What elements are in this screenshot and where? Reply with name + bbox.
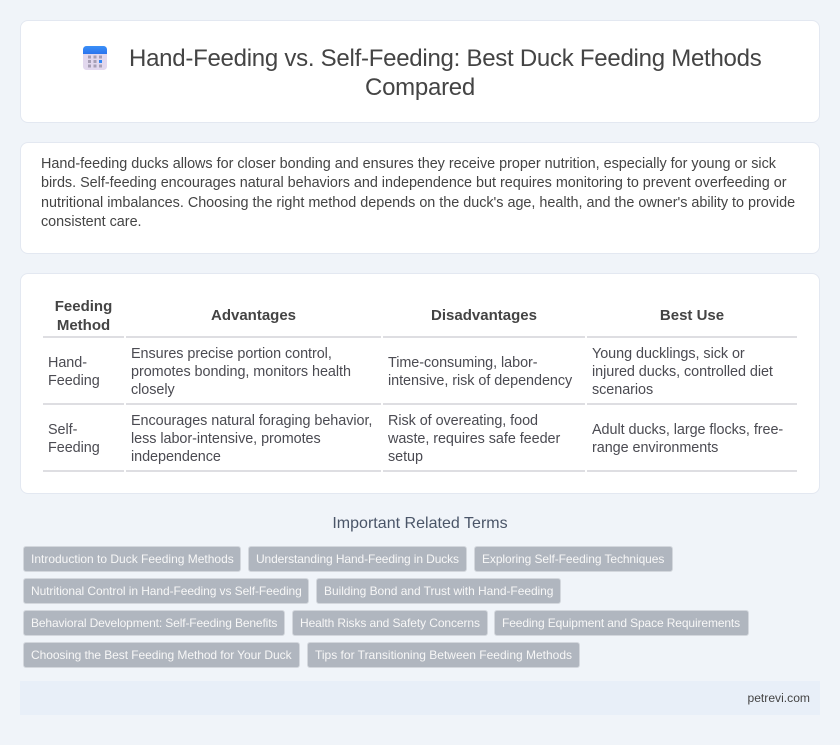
related terms tags <box>23 546 749 668</box>
intro text: birds. Self-feeding encourages natural behaviors and independence but requires monitoring to prevent overfeeding or <box>41 175 786 191</box>
footer source: petrevi.com <box>747 691 810 705</box>
related terms tags: Feeding Equipment and Space Requirements <box>502 616 740 630</box>
table row: hand-feeding: injured ducks, controlled diet <box>592 364 773 380</box>
intro text: nutritional imbalances. Choosing the right method depends on the duck's age, health, and the owner's ability to provide <box>41 195 795 211</box>
table header: Feeding <box>55 298 112 315</box>
table row: hand-feeding: Time-consuming, labor- <box>388 355 538 371</box>
table header: Disadvantages <box>431 307 537 324</box>
table row: self-feeding: less labor-intensive, promotes <box>131 431 321 447</box>
table row: hand-feeding: Hand- <box>48 355 87 371</box>
table row: hand-feeding <box>48 346 773 398</box>
table row: hand-feeding: closely <box>131 382 175 398</box>
related terms tags: Understanding Hand-Feeding in Ducks <box>256 552 459 566</box>
related terms tags: Behavioral Development: Self-Feeding Benefits <box>31 616 277 630</box>
table row: self-feeding: Feeding <box>48 440 100 456</box>
table row: hand-feeding: promotes bonding, monitors health <box>131 364 351 380</box>
intro text: Hand-feeding ducks allows for closer bonding and ensures they receive proper nutrition, especially for young or sick <box>41 156 776 172</box>
related terms tags: Exploring Self-Feeding Techniques <box>482 552 664 566</box>
related terms tags: Tips for Transitioning Between Feeding Methods <box>315 648 572 662</box>
related terms tags: Building Bond and Trust with Hand-Feeding <box>324 584 553 598</box>
table header <box>55 298 724 334</box>
table row: self-feeding: setup <box>388 449 423 465</box>
table row: self-feeding: Adult ducks, large flocks, free- <box>592 422 783 438</box>
table row: self-feeding: Self- <box>48 422 77 438</box>
header card <box>20 20 820 123</box>
title: Compared <box>365 74 475 101</box>
title <box>129 45 761 101</box>
table header: Method <box>57 317 110 334</box>
table row: hand-feeding: scenarios <box>592 382 653 398</box>
related terms tags: Nutritional Control in Hand-Feeding vs Self-Feeding <box>31 584 302 598</box>
title: Hand-Feeding vs. Self-Feeding: Best Duck Feeding Methods <box>129 45 761 72</box>
table row: self-feeding: Risk of overeating, food <box>388 413 538 429</box>
table row: hand-feeding: Young ducklings, sick or <box>592 346 745 362</box>
related terms heading: Important Related Terms <box>332 515 508 532</box>
table header: Advantages <box>211 307 296 324</box>
intro text <box>41 156 795 230</box>
related terms tags: Choosing the Best Feeding Method for Your Duck <box>31 648 292 662</box>
table header: Best Use <box>660 307 724 324</box>
table row: hand-feeding: intensive, risk of dependency <box>388 373 572 389</box>
comparison table panel <box>20 273 820 494</box>
intro text: consistent care. <box>41 214 142 230</box>
table row: self-feeding <box>48 413 783 465</box>
table row: self-feeding: independence <box>131 449 221 465</box>
table row: self-feeding: waste, requires safe feeder <box>388 431 560 447</box>
table row: self-feeding: Encourages natural foraging behavior, <box>131 413 372 429</box>
table row: self-feeding: range environments <box>592 440 718 456</box>
table row: hand-feeding: Feeding <box>48 373 100 389</box>
icon: calendar <box>83 46 107 70</box>
intro panel <box>20 142 820 254</box>
footer bar <box>20 681 820 715</box>
related terms tags: Introduction to Duck Feeding Methods <box>31 552 234 566</box>
table row: hand-feeding: Ensures precise portion control, <box>131 346 332 362</box>
related terms tags: Health Risks and Safety Concerns <box>300 616 480 630</box>
